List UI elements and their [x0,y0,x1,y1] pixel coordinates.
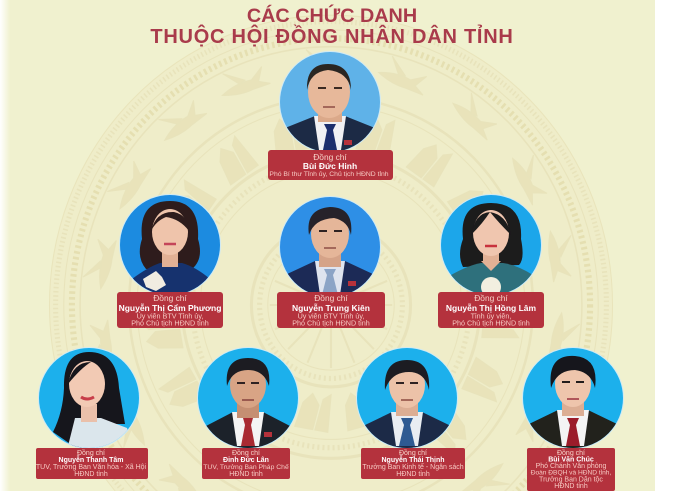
label: Đồng chí [557,448,585,457]
label: TUV, Trưởng Ban Pháp Chế [203,462,289,471]
label: Đồng chí [399,448,427,457]
person 5: Nguyễn Thanh Tâm [36,346,148,479]
label: Đoàn ĐBQH và HĐND tỉnh, [531,468,611,476]
label: TUV, Trưởng Ban Văn hóa - Xã Hội [36,463,147,471]
person 6: Đinh Đức Lân [196,346,300,479]
label: Đinh Đức Lân [223,457,269,464]
label [527,448,615,491]
label: Phó Chủ tịch HĐND tỉnh [131,318,209,328]
label [117,292,223,328]
portrait [521,346,625,450]
label: Nguyễn Thị Hồng Lâm [446,303,537,313]
label: HĐND tỉnh [554,482,588,490]
label: Phó Chủ tịch HĐND tỉnh [292,318,370,328]
portrait [278,50,382,154]
label [277,292,385,328]
label: Tỉnh ủy viên, [471,312,511,320]
label: Nguyễn Thị Cẩm Phương [119,303,221,313]
label: Phó Chủ tịch HĐND tỉnh [452,318,530,328]
label [36,448,148,479]
label: Nguyễn Thanh Tâm [59,455,123,464]
drum: figures ring [141,111,521,456]
bronze drum background pattern [49,15,613,491]
label: Đồng chí [77,448,105,457]
person 8: Bùi Văn Chúc [521,346,625,491]
drum: flying birds ring [82,48,581,491]
drum: central star rays [270,280,392,368]
label: Đồng chí [232,448,260,457]
label: Đồng chí [314,293,348,303]
label [268,150,393,180]
label: HĐND tỉnh [396,470,430,478]
label: Trưởng Ban Kinh tế - Ngân sách [362,462,464,471]
label: Đồng chí [474,293,508,303]
label: Đồng chí [153,293,187,303]
label: Phó Bí thư Tỉnh ủy, Chủ tịch HĐND tỉnh [269,170,389,178]
label: Ủy viên BTV Tỉnh ủy, [298,312,364,320]
person 1: Bùi Đức Hinh [268,50,393,180]
label [438,292,544,328]
label [202,448,290,479]
label: HĐND tỉnh [229,470,263,478]
person 4: Nguyễn Thị Hồng Lâm [438,193,544,328]
label: Trưởng Ban Dân tộc [539,476,603,484]
portrait [439,193,543,297]
portrait [118,193,222,297]
label: Ủy viên BTV Tỉnh ủy, [137,312,203,320]
person 2: Nguyễn Thị Cẩm Phương [117,193,223,328]
person 3: Nguyễn Trung Kiên [277,195,385,328]
label: Đồng chí [313,152,347,162]
person 7: Nguyễn Thái Thịnh [355,346,465,479]
portrait [278,195,382,299]
label: Bùi Đức Hinh [303,161,357,171]
label: Bùi Văn Chúc [548,456,594,464]
label: Nguyễn Trung Kiên [292,303,370,313]
portrait [355,346,459,450]
label [361,448,465,479]
label: HĐND tỉnh [74,470,108,478]
label: Nguyễn Thái Thịnh [382,455,444,464]
title: CÁC CHỨC DANH [247,3,417,27]
title: THUỘC HỘI ĐỒNG NHÂN DÂN TỈNH [150,24,514,48]
portrait [37,346,141,450]
portrait [196,346,300,450]
label: Phó Chánh Văn phòng [536,463,607,470]
title [150,3,514,48]
